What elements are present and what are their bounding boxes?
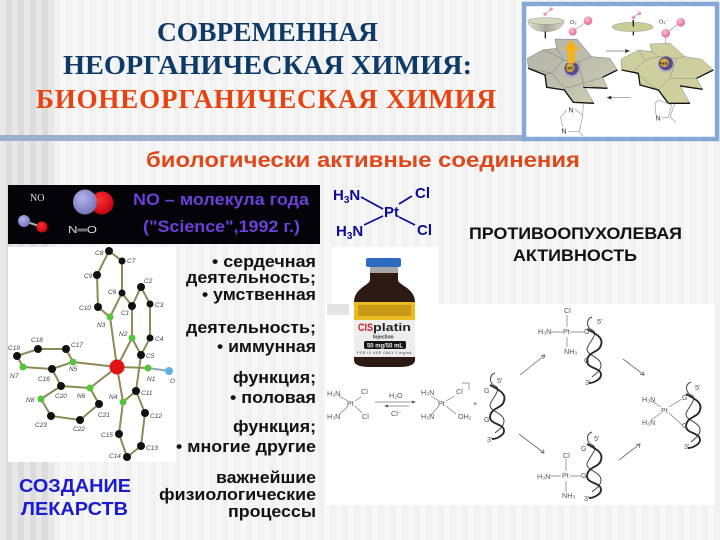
structure: cisplatin: Pt bbox=[347, 399, 354, 408]
text: NO molecule of the year bbox=[133, 191, 310, 236]
structure: aquated cisplatin: + bbox=[473, 399, 477, 408]
structure: upper monoadduct: H₃N bbox=[538, 327, 551, 336]
text: drug design: ЛЕКАРСТВ bbox=[21, 499, 128, 519]
panel: ruthenium complex structure: C10 bbox=[79, 305, 91, 312]
icon: oxygen molecules: O₂ bbox=[570, 20, 577, 26]
structure: DNA crosslink: G bbox=[682, 421, 688, 430]
panel: ruthenium complex structure: C21 bbox=[98, 412, 110, 419]
structure: lower monoadduct: G bbox=[581, 444, 587, 453]
structure: upper monoadduct: 3' bbox=[585, 378, 591, 387]
text: physiological functions: физиологические bbox=[159, 486, 316, 504]
panel: ruthenium complex structure: C16 bbox=[38, 376, 50, 383]
horizontal blue rule bbox=[0, 135, 525, 141]
icon: iron centres: FeII bbox=[659, 61, 668, 67]
panel: ruthenium complex structure: C20 bbox=[55, 393, 67, 400]
icon: oxygen molecules bbox=[543, 7, 685, 43]
panel: ruthenium complex structure: C19 bbox=[8, 345, 20, 352]
panel: heme oxygen binding diagram: N bbox=[568, 105, 574, 114]
structure: DNA crosslink: 3' bbox=[684, 442, 690, 451]
icon: cisplatin bottle: CIS bbox=[358, 322, 373, 334]
panel: ruthenium complex structure: C23 bbox=[35, 422, 47, 429]
text: physiological functions: • иммунная bbox=[217, 338, 316, 356]
arrows: hydrolysis equilibrium: H₂O bbox=[389, 391, 403, 400]
arrows: reaction pathways bbox=[519, 355, 644, 460]
icon: left dish bbox=[528, 18, 564, 38]
structure: DNA crosslink: H₃N bbox=[642, 418, 655, 427]
formula: cisplatin: N bbox=[349, 187, 360, 204]
panel: ruthenium complex structure: C14 bbox=[109, 453, 121, 460]
structure: aquated cisplatin: Cl bbox=[456, 387, 463, 396]
panel: ruthenium complex structure: C22 bbox=[73, 426, 85, 433]
text: physiological functions: процессы bbox=[228, 503, 316, 521]
structure: free DNA: G bbox=[484, 415, 490, 424]
panel: ruthenium complex structure: N3 bbox=[97, 322, 106, 329]
icon: small NO molecule bbox=[18, 215, 48, 232]
structure: free DNA: 3' bbox=[487, 435, 493, 444]
text: physiological functions bbox=[159, 253, 316, 521]
icon: process arrows bbox=[606, 49, 631, 100]
panel: NO molecule of the year bbox=[8, 185, 320, 244]
label: N=O: N═O bbox=[68, 225, 97, 236]
formula: cisplatin: Cl bbox=[417, 222, 432, 239]
title: НЕОРГАНИЧЕСКАЯ ХИМИЯ: bbox=[63, 50, 472, 80]
structure: upper monoadduct bbox=[538, 306, 603, 387]
text: drug design: СОЗДАНИЕ bbox=[19, 476, 131, 496]
structure: DNA crosslink: G bbox=[682, 393, 688, 402]
formula: cisplatin: Pt bbox=[384, 204, 399, 221]
text: physiological functions: • многие другие bbox=[176, 438, 316, 456]
text: antitumor activity: АКТИВНОСТЬ bbox=[513, 247, 637, 265]
structure: lower monoadduct: G bbox=[581, 471, 587, 480]
structure: cisplatin: H₃N bbox=[327, 412, 340, 421]
panel: ruthenium complex structure: N4 bbox=[109, 394, 118, 401]
panel: ruthenium complex structure: N7 bbox=[10, 373, 19, 380]
panel: heme oxygen binding diagram bbox=[524, 4, 717, 139]
text: physiological functions: функция; bbox=[233, 418, 316, 436]
panel: bottle backdrop bbox=[331, 247, 439, 305]
panel: heme oxygen binding diagram: N bbox=[655, 114, 661, 123]
structure: cisplatin: Cl bbox=[362, 412, 369, 421]
label: NO: NO bbox=[30, 193, 44, 204]
structure: cisplatin: Cl bbox=[361, 387, 368, 396]
formula: cisplatin: 3 bbox=[347, 231, 353, 242]
structure: lower monoadduct: Cl bbox=[563, 451, 570, 460]
panel: ruthenium complex structure: C12 bbox=[150, 413, 162, 420]
icon: oxygen molecules: O₂⁻ bbox=[659, 19, 669, 25]
icon: cisplatin bottle: Injection bbox=[373, 334, 394, 340]
structure: DNA crosslink: 5' bbox=[695, 383, 701, 392]
title bbox=[36, 17, 496, 114]
structure: aquated cisplatin: H₃N bbox=[421, 412, 434, 421]
structure: lower monoadduct: 5' bbox=[594, 434, 600, 443]
structure: lower monoadduct: Pt bbox=[562, 471, 569, 480]
structure: lower monoadduct: 3' bbox=[584, 494, 590, 503]
formula: cisplatin: H bbox=[336, 223, 347, 240]
panel: ruthenium complex structure: C4 bbox=[155, 336, 164, 343]
panel: DNA binding mechanism bbox=[325, 304, 715, 505]
structure: DNA crosslink bbox=[642, 382, 701, 451]
icon: cisplatin bottle: platin bbox=[373, 322, 411, 334]
structure: aquated cisplatin: OH₂ bbox=[458, 412, 472, 421]
panel: heme oxygen binding diagram: N bbox=[561, 126, 567, 135]
icon: cisplatin bottle: FOR IV USE ONLY 1 mg/mL bbox=[357, 351, 412, 355]
icon: cisplatin bottle bbox=[354, 258, 415, 367]
structure: lower monoadduct bbox=[537, 432, 602, 503]
icon: cisplatin bottle: 50 mg/50 mL bbox=[367, 342, 403, 350]
structure: DNA crosslink: Pt bbox=[661, 406, 668, 415]
text: antitumor activity: ПРОТИВООПУХОЛЕВАЯ bbox=[469, 225, 682, 243]
panel: ruthenium complex structure: N1 bbox=[147, 376, 156, 383]
panel: ruthenium complex structure: C5 bbox=[146, 353, 155, 360]
text: physiological functions: важнейшие bbox=[216, 469, 316, 487]
icon: large NO molecule bbox=[73, 190, 114, 214]
formula: cisplatin: N bbox=[352, 223, 363, 240]
structure: cisplatin: H₃N bbox=[327, 389, 340, 398]
icon: right heme plate bbox=[621, 43, 713, 103]
panel: ruthenium complex structure bbox=[8, 247, 176, 462]
title: БИОНЕОРГАНИЧЕСКАЯ ХИМИЯ bbox=[36, 84, 496, 114]
icon: right dish bbox=[612, 20, 653, 35]
structure: aquated cisplatin: Pt bbox=[438, 399, 445, 408]
text: NO molecule of the year: NO – молекула года bbox=[133, 191, 310, 209]
panel: ruthenium complex structure: N8 bbox=[26, 397, 35, 404]
panel: ruthenium complex structure: N5 bbox=[69, 366, 78, 373]
structure: upper monoadduct: 5' bbox=[597, 317, 603, 326]
formula: cisplatin bbox=[333, 185, 432, 242]
title: СОВРЕМЕННАЯ bbox=[157, 17, 378, 47]
structure: free DNA: G bbox=[484, 386, 490, 395]
panel: ruthenium complex structure: N6 bbox=[77, 393, 86, 400]
icon: iron centres bbox=[564, 56, 674, 78]
structure: upper monoadduct: G bbox=[584, 327, 590, 336]
formula: cisplatin: H bbox=[333, 187, 344, 204]
panel: ruthenium complex structure: C9 bbox=[84, 273, 93, 280]
text: physiological functions: функция; bbox=[233, 369, 316, 387]
panel: ruthenium complex structure: C13 bbox=[146, 445, 158, 452]
arrows: hydrolysis equilibrium bbox=[375, 391, 416, 418]
panel: ruthenium complex structure: C1 bbox=[121, 310, 130, 317]
formula: cisplatin: 3 bbox=[344, 195, 350, 206]
text: antitumor activity bbox=[469, 225, 682, 265]
panel: ruthenium complex structure: C15 bbox=[101, 432, 113, 439]
panel: ruthenium complex structure: C7 bbox=[127, 258, 136, 265]
panel: ruthenium complex structure: C11 bbox=[141, 390, 153, 397]
structure: lower monoadduct: H₃N bbox=[537, 472, 550, 481]
structure: free DNA bbox=[484, 373, 505, 444]
panel: ruthenium complex structure: C2 bbox=[144, 278, 153, 285]
structure: upper monoadduct: Pt bbox=[563, 327, 570, 336]
panel: ruthenium complex structure: C17 bbox=[71, 342, 83, 349]
structure: upper monoadduct: Cl bbox=[564, 306, 571, 315]
panel: ruthenium complex structure: C8 bbox=[95, 250, 104, 257]
structure: upper monoadduct: NH₃ bbox=[564, 347, 577, 356]
text: physiological functions: • сердечная bbox=[212, 253, 316, 271]
heading: bioactive compounds: биологически активные соединения bbox=[146, 149, 580, 172]
arrows: hydrolysis equilibrium: Cl⁻ bbox=[391, 409, 402, 418]
structure: upper monoadduct: G bbox=[584, 356, 590, 365]
icon: iron centres: FeII bbox=[564, 66, 574, 72]
structure: cisplatin bbox=[327, 387, 369, 421]
panel: ruthenium complex structure: N2 bbox=[119, 331, 128, 338]
structure: lower monoadduct: NH₃ bbox=[562, 491, 575, 500]
icon: yellow arrow bbox=[564, 40, 579, 63]
structure: DNA crosslink: H₃N bbox=[642, 395, 655, 404]
structure: free DNA: 5' bbox=[497, 376, 503, 385]
text: physiological functions: • половая bbox=[230, 389, 316, 407]
icon: imidazole rings bbox=[561, 100, 676, 136]
panel: ruthenium complex structure: C6 bbox=[108, 289, 117, 296]
text: physiological functions: • умственная bbox=[202, 286, 316, 304]
structure: aquated cisplatin bbox=[421, 383, 477, 421]
formula: cisplatin: Cl bbox=[415, 185, 430, 202]
text: drug design bbox=[19, 476, 131, 519]
text: physiological functions: деятельность; bbox=[186, 319, 316, 337]
text: NO molecule of the year: ("Science",1992 г.) bbox=[143, 218, 300, 236]
structure: aquated cisplatin: H₃N bbox=[421, 388, 434, 397]
panel: ruthenium complex structure: C18 bbox=[31, 337, 43, 344]
panel: ruthenium complex structure: C3 bbox=[155, 302, 164, 309]
text: physiological functions: деятельность; bbox=[186, 269, 316, 287]
icon: left heme plate bbox=[527, 39, 617, 103]
panel: ruthenium complex structure: O bbox=[170, 378, 175, 385]
